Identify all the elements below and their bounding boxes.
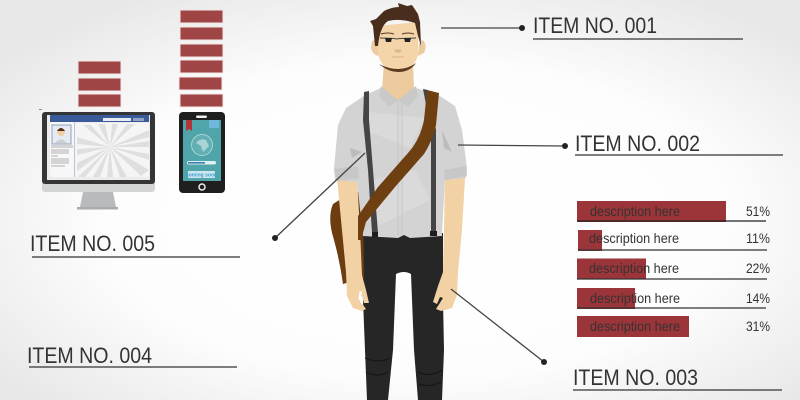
bag xyxy=(330,192,364,284)
row 1 xyxy=(577,201,770,222)
bar stack above phone xyxy=(179,10,223,107)
callout: item no. 005 xyxy=(30,153,365,257)
callout: item no. 002 xyxy=(458,131,783,156)
callout: item no. 005: ITEM NO. 005 xyxy=(30,231,155,256)
row 2 xyxy=(578,230,770,251)
row 4: 14% xyxy=(746,290,770,306)
bar stack above monitor xyxy=(78,61,121,107)
icon: desktop monitor xyxy=(39,109,155,210)
ears xyxy=(371,40,426,56)
sunburst xyxy=(77,124,149,177)
sleeve creases xyxy=(350,130,452,158)
hair xyxy=(370,3,421,46)
bar chart: descriptions xyxy=(577,201,770,337)
knee wrinkles xyxy=(365,358,442,386)
left cuff xyxy=(334,166,359,181)
row 2: 11% xyxy=(746,230,770,246)
bag strap xyxy=(358,90,439,240)
shirt light folds xyxy=(368,112,430,226)
callout: item no. 004: ITEM NO. 004 xyxy=(27,343,152,368)
callout: item no. 003: ITEM NO. 003 xyxy=(573,365,698,390)
row 3: description here xyxy=(589,260,679,276)
icon: smartphone: coming soon xyxy=(186,172,217,178)
callout: item no. 001 xyxy=(441,13,743,39)
eyes xyxy=(385,38,411,42)
shirt body xyxy=(334,88,467,238)
row 5 xyxy=(577,316,770,337)
jaw shadow xyxy=(379,63,416,72)
trousers xyxy=(362,233,444,400)
nose and mouth xyxy=(392,50,404,57)
left hand highlight xyxy=(359,291,362,305)
profile photo xyxy=(52,125,71,144)
row 2: description here xyxy=(589,230,679,246)
row 3 xyxy=(577,258,770,280)
suspenders xyxy=(363,89,436,233)
shirt collar xyxy=(379,86,418,107)
callout: item no. 001: ITEM NO. 001 xyxy=(533,13,657,38)
row 3: 22% xyxy=(746,260,770,276)
suspender clips xyxy=(372,231,437,237)
shirt placket xyxy=(398,100,402,235)
row 4 xyxy=(577,288,770,309)
character: man with messenger bag xyxy=(330,3,467,400)
right cuff xyxy=(444,166,467,180)
glasses xyxy=(380,38,416,39)
icon: smartphone xyxy=(179,112,225,193)
row 5: 31% xyxy=(746,318,770,334)
callout: item no. 003 xyxy=(451,289,782,390)
neck xyxy=(382,62,414,100)
callout: item no. 002: ITEM NO. 002 xyxy=(575,131,700,156)
row 1: description here xyxy=(590,203,680,219)
profile text lines xyxy=(51,145,73,167)
row 1: 51% xyxy=(746,203,770,219)
right arm and hand xyxy=(433,178,465,311)
row 5: description here xyxy=(590,318,680,334)
left arm and hand xyxy=(337,178,369,311)
brows xyxy=(381,33,414,34)
row 4: description here xyxy=(590,290,680,306)
face xyxy=(377,22,418,72)
